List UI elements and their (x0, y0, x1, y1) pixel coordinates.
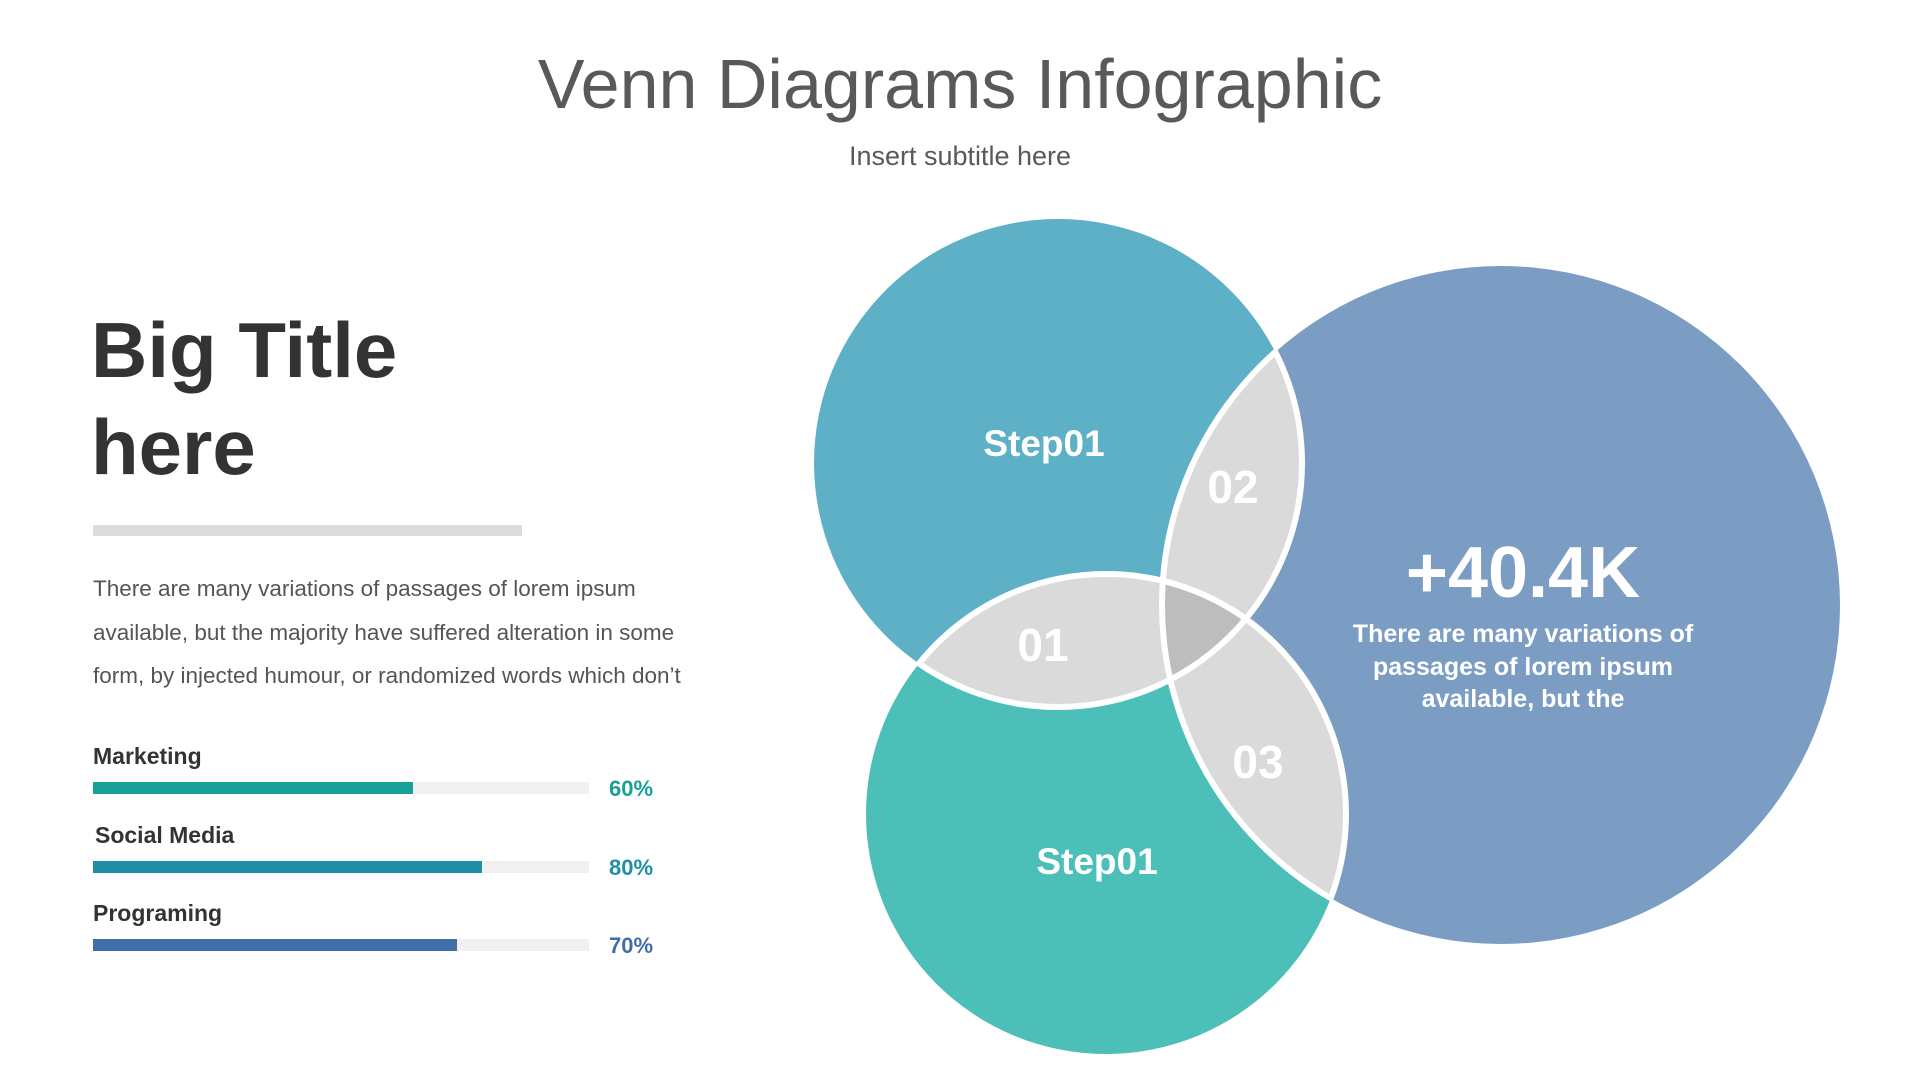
paragraph: There are many variations of passages of lorem ipsum (93, 576, 636, 601)
progress: marketing: 60% (609, 776, 653, 801)
progress: programing: 70% (609, 933, 653, 958)
subtitle: Insert subtitle here (849, 141, 1071, 171)
venn labels: available, but the (1422, 685, 1625, 713)
title: Venn Diagrams Infographic (538, 45, 1382, 123)
big title: Big Title (91, 306, 397, 394)
paragraph (93, 576, 681, 688)
lens 03 (1174, 623, 1343, 894)
venn labels: passages of lorem ipsum (1373, 653, 1673, 681)
center overlap (1165, 584, 1241, 675)
paragraph: form, by injected humour, or randomized words which don’t (93, 663, 681, 688)
venn labels: 01 (1017, 619, 1069, 671)
venn labels: Step01 (983, 423, 1105, 464)
paragraph: available, but the majority have suffered alteration in some (93, 620, 674, 644)
circle: big (1162, 266, 1840, 944)
venn labels: There are many variations of (1353, 620, 1694, 648)
lens 02 (1166, 357, 1299, 615)
lens 01 (924, 577, 1167, 704)
progress: social media: Social Media (95, 822, 234, 848)
venn labels: 03 (1232, 736, 1284, 788)
white outlines (916, 349, 1349, 901)
divider bar (93, 525, 522, 536)
circle: step01 top (814, 219, 1302, 707)
big title (91, 306, 397, 491)
venn diagram (814, 219, 1840, 1054)
venn labels (983, 423, 1694, 882)
progress: social media: 80% (609, 855, 653, 880)
progress: marketing: Marketing (93, 743, 202, 769)
progress: marketing (93, 743, 653, 801)
big title: here (91, 403, 256, 491)
venn labels: +40.4K (1406, 533, 1640, 613)
progress: social media (93, 822, 653, 880)
circle: step01 bottom (866, 574, 1346, 1054)
venn labels: 02 (1207, 461, 1259, 513)
progress: programing (93, 900, 653, 958)
venn labels: Step01 (1036, 841, 1158, 882)
progress: programing: Programing (93, 900, 222, 926)
